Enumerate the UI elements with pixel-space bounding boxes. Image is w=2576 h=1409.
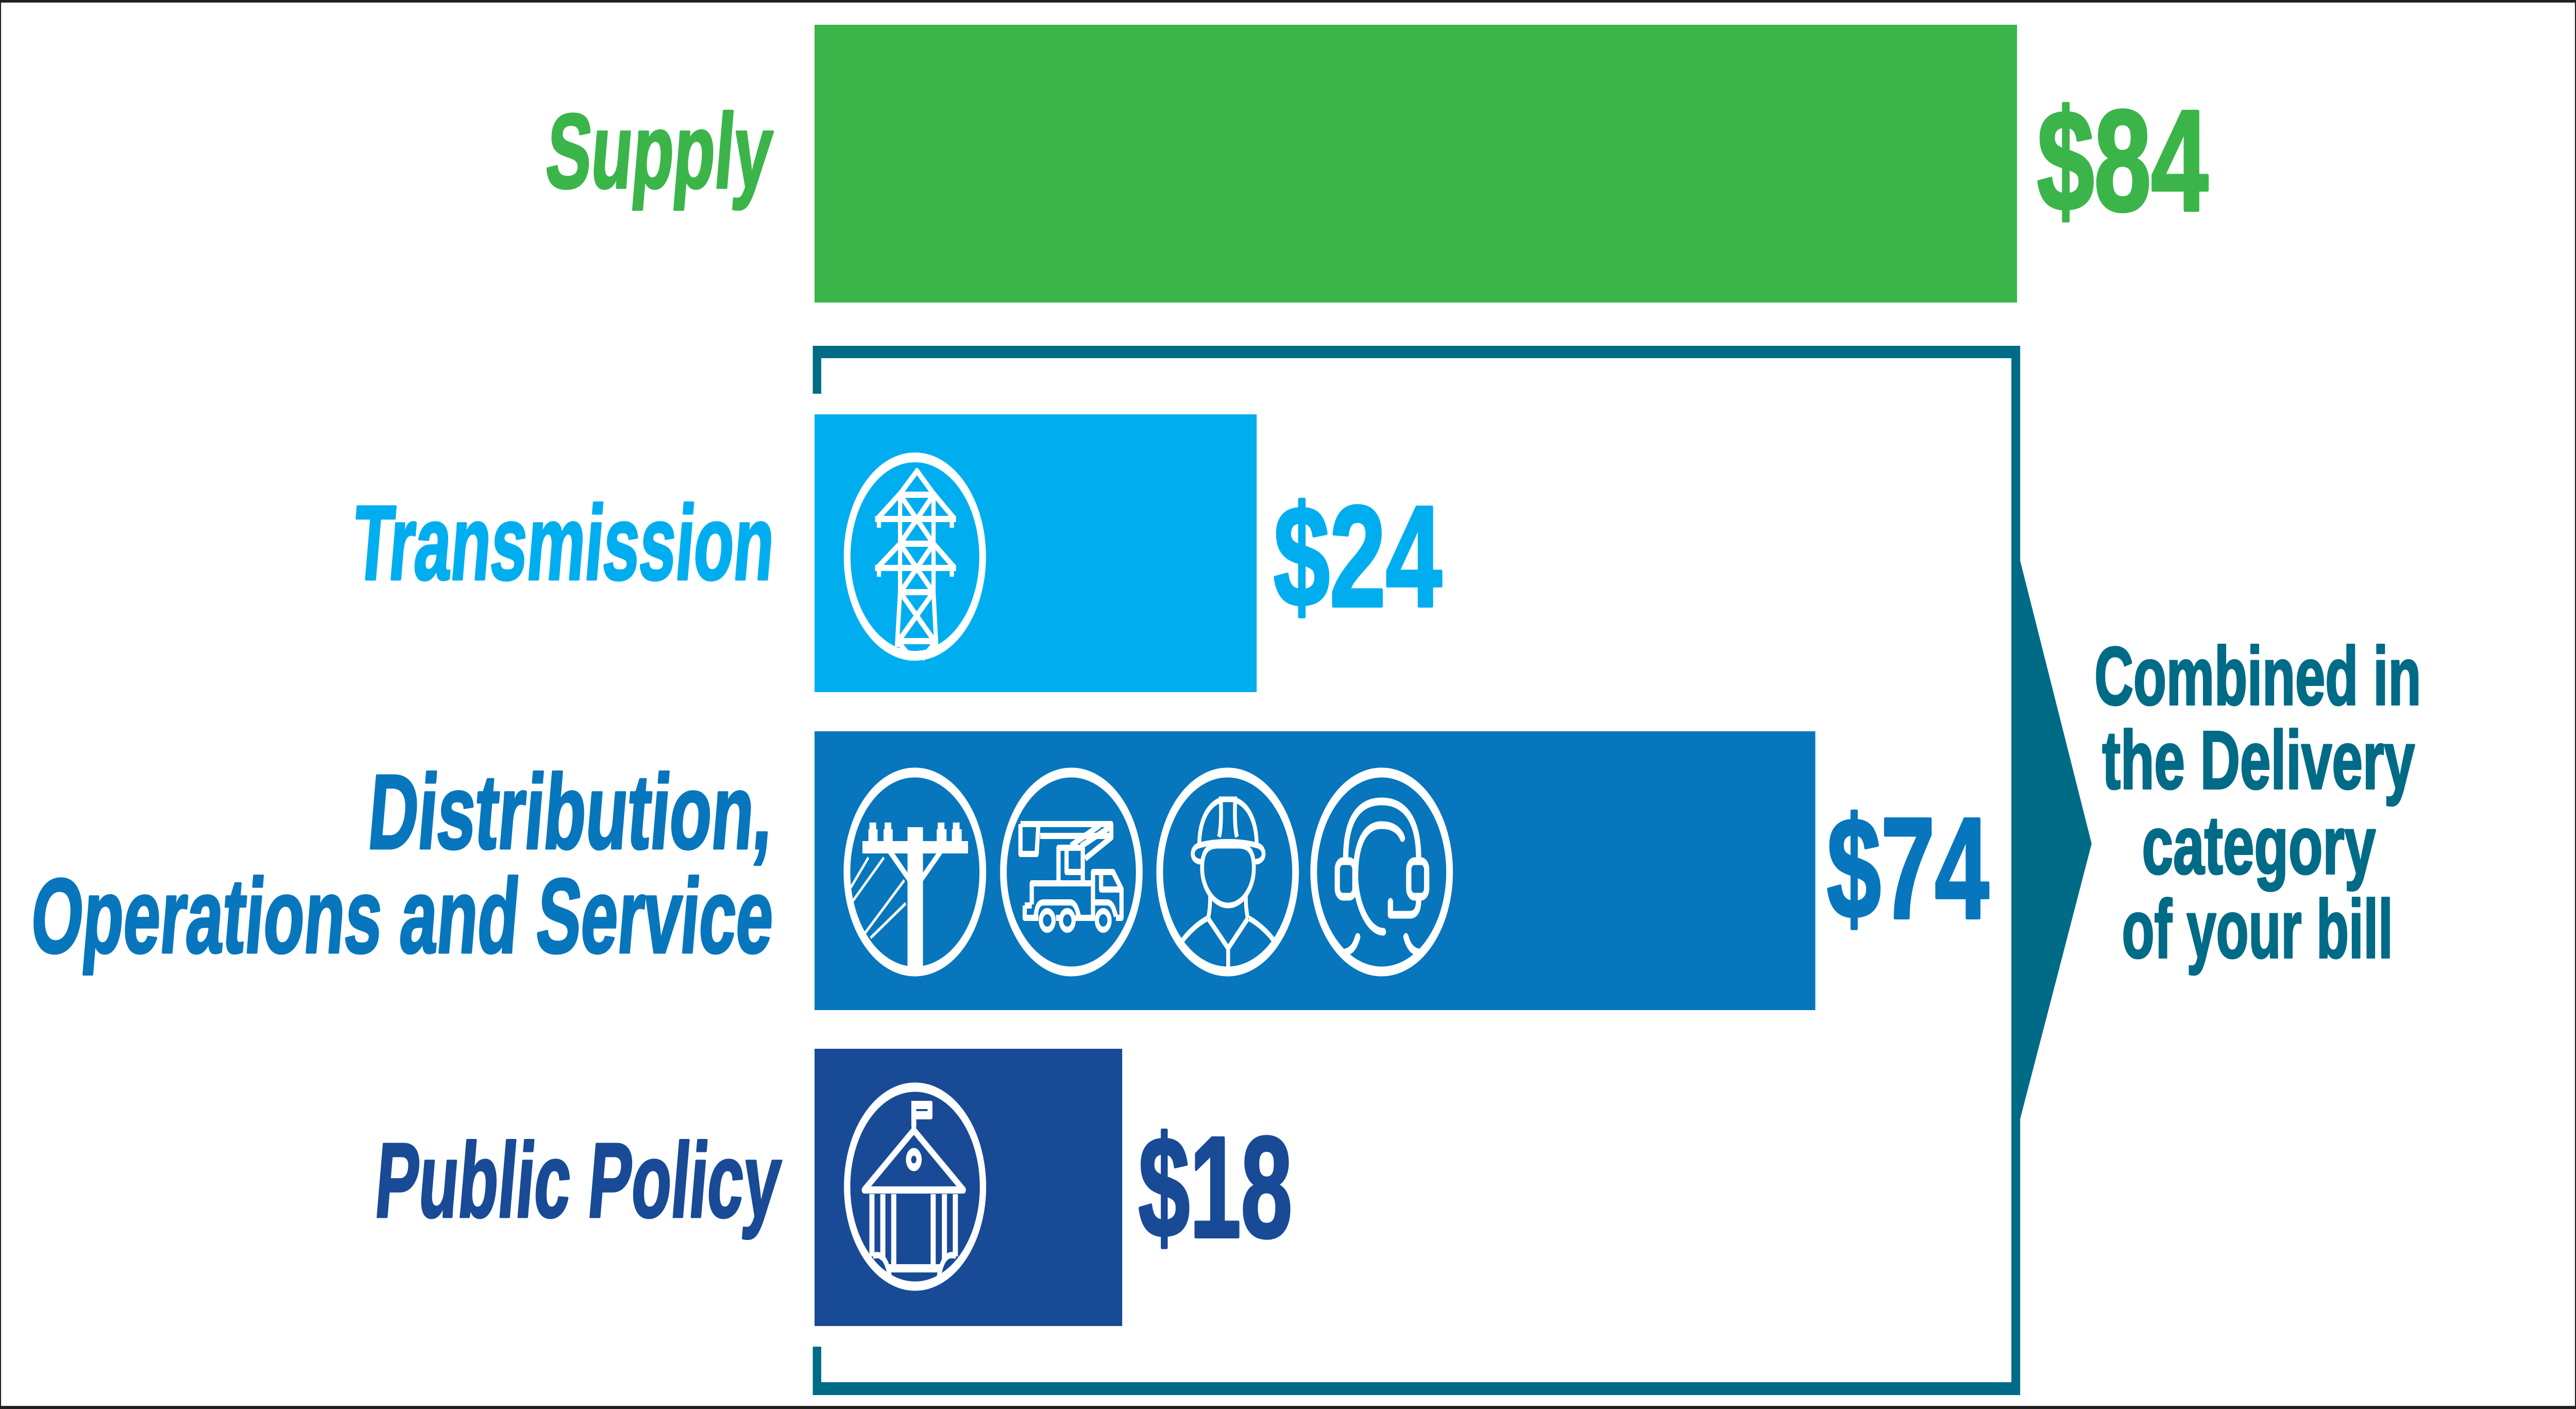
bar: Distribution	[815, 731, 1816, 1010]
label: Distribution, Operations and Service: Distribution,	[364, 753, 778, 871]
value: $74: $74	[1827, 788, 1989, 949]
icon: school building	[847, 1087, 983, 1286]
callout: combined in delivery: the Delivery	[2102, 714, 2415, 807]
label: Supply: Supply	[542, 93, 777, 210]
label: Distribution, Operations and Service	[27, 753, 778, 975]
icon: bucket truck	[1004, 773, 1139, 971]
icon: headset	[1314, 773, 1450, 971]
icon: worker in hard hat	[1160, 773, 1296, 971]
panel: Public Policy row	[371, 1049, 1292, 1326]
label: Public Policy: Public Policy	[371, 1122, 785, 1239]
panel: Transmission row	[349, 414, 1442, 692]
value: $84: $84	[2037, 80, 2208, 241]
label: Transmission: Transmission	[349, 484, 779, 602]
panel: Supply row	[542, 25, 2208, 303]
label: Distribution, Operations and Service: Operations and Service	[27, 858, 778, 975]
icon: utility pole	[847, 773, 983, 974]
callout: combined in delivery: category	[2142, 799, 2376, 892]
callout: combined in delivery: Combined in	[2094, 630, 2421, 723]
value: $24: $24	[1274, 476, 1442, 637]
callout: combined in delivery: of your bill	[2122, 883, 2393, 976]
bar: Transmission	[815, 414, 1257, 692]
bracket: delivery grouping with arrow	[813, 346, 2092, 1395]
bar: Public Policy	[815, 1049, 1122, 1326]
panel: Distribution, Operations and Service row	[27, 731, 1989, 1010]
bar: Supply	[815, 25, 2017, 303]
value: $18: $18	[1139, 1107, 1292, 1268]
callout: combined in delivery	[2094, 630, 2421, 976]
icon: transmission tower	[847, 458, 982, 659]
